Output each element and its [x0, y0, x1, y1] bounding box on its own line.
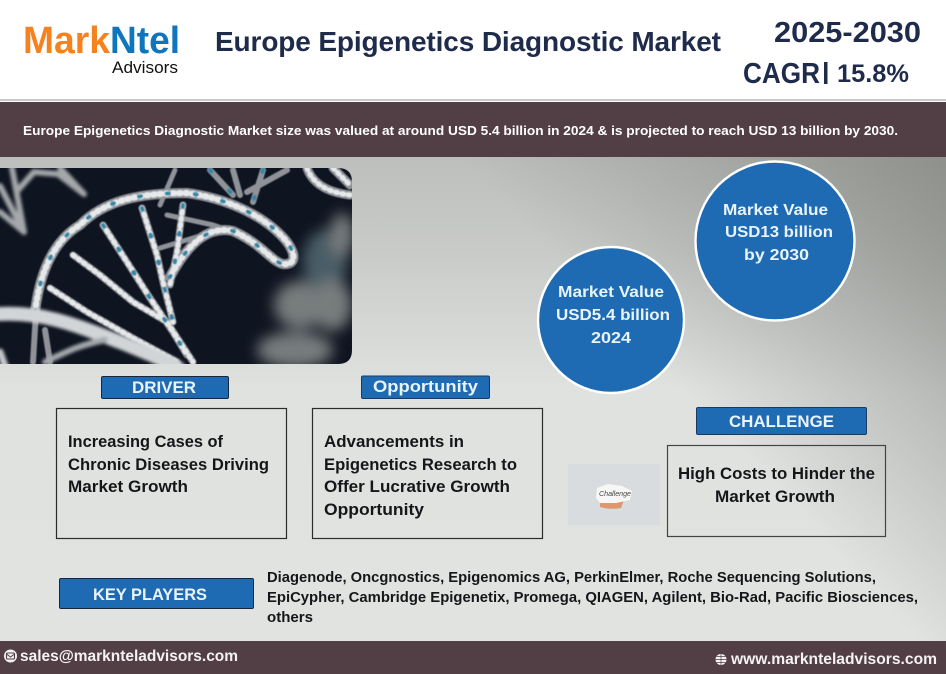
panel: opportunity: Advancements in — [324, 433, 464, 451]
label: challenge — [696, 408, 866, 434]
forecast period: 2025-2030 — [774, 17, 921, 49]
label: driver: DRIVER — [132, 379, 196, 397]
CAGR figure — [743, 58, 909, 90]
label: driver — [102, 376, 228, 398]
logo: MarkNtel Advisors: Mark — [23, 20, 111, 62]
circle: market value 2030: USD13 billion — [725, 224, 833, 241]
text: website: www.marknteladvisors.com — [730, 651, 937, 668]
circle: market value 2024: 2024 — [591, 330, 631, 347]
smoke — [257, 213, 354, 368]
CAGR figure: 15.8% — [837, 60, 909, 88]
strands — [33, 168, 350, 362]
text: key players list — [267, 570, 918, 626]
image: challenge paper: Challenge — [599, 491, 631, 498]
panel: opportunity: Opportunity — [324, 501, 425, 519]
panel: driver: Chronic Diseases Driving — [68, 456, 269, 474]
panel: challenge — [668, 446, 886, 536]
header — [0, 0, 946, 101]
summary banner: Europe Epigenetics Diagnostic Market size was valued at around USD 5.4 billion in 2024 & is projected to reach USD 13 billion by 2030. — [23, 123, 898, 138]
text: key players list: others — [267, 610, 313, 626]
blurred background strands — [0, 168, 84, 232]
text: key players list: Diagenode, Oncgnostics, Epigenomics AG, PerkinElmer, Roche Sequencing Solutions, — [267, 570, 876, 586]
icon: email — [4, 650, 17, 662]
panel: challenge: Market Growth — [715, 488, 835, 506]
circle: market value 2030: by 2030 — [744, 247, 809, 264]
page background — [0, 157, 946, 641]
label: opportunity: Opportunity — [373, 378, 479, 396]
image: challenge paper — [568, 464, 660, 525]
panel: opportunity — [312, 408, 542, 538]
label: key players: KEY PLAYERS — [93, 585, 207, 604]
circle: market value 2024: Market Value — [558, 284, 664, 301]
logo: MarkNtel Advisors — [23, 20, 180, 77]
logo: MarkNtel Advisors: Advisors — [112, 58, 178, 77]
text: key players list: EpiCypher, Cambridge Epigenetix, Promega, QIAGEN, Agilent, Bio-Rad, Pacific Biosciences, — [267, 590, 918, 606]
panel: driver: Market Growth — [68, 478, 188, 496]
CAGR figure: CAGR — [743, 58, 820, 90]
title: Europe Epigenetics Diagnostic Market — [215, 26, 721, 57]
image: DNA helix — [0, 168, 354, 368]
panel: opportunity: Offer Lucrative Growth — [324, 478, 510, 496]
panel: driver: Increasing Cases of — [68, 433, 223, 451]
label: opportunity — [362, 376, 490, 398]
circle: market value 2024 — [538, 247, 684, 393]
summary banner — [0, 102, 946, 157]
panel: driver — [56, 408, 286, 538]
panel: opportunity: Epigenetics Research to — [324, 456, 517, 474]
logo: MarkNtel Advisors: Ntel — [110, 20, 180, 62]
panel: challenge: High Costs to Hinder the — [678, 465, 875, 483]
text: email: sales@marknteladvisors.com — [20, 648, 238, 665]
footer — [0, 641, 946, 674]
foreground blurred strand — [0, 314, 178, 368]
label: challenge: CHALLENGE — [729, 412, 834, 431]
circle: market value 2024: USD5.4 billion — [556, 307, 670, 324]
circle: market value 2030: Market Value — [723, 202, 828, 219]
label: key players — [60, 578, 254, 608]
circle: market value 2030 — [696, 162, 854, 320]
icon: globe — [716, 654, 726, 665]
